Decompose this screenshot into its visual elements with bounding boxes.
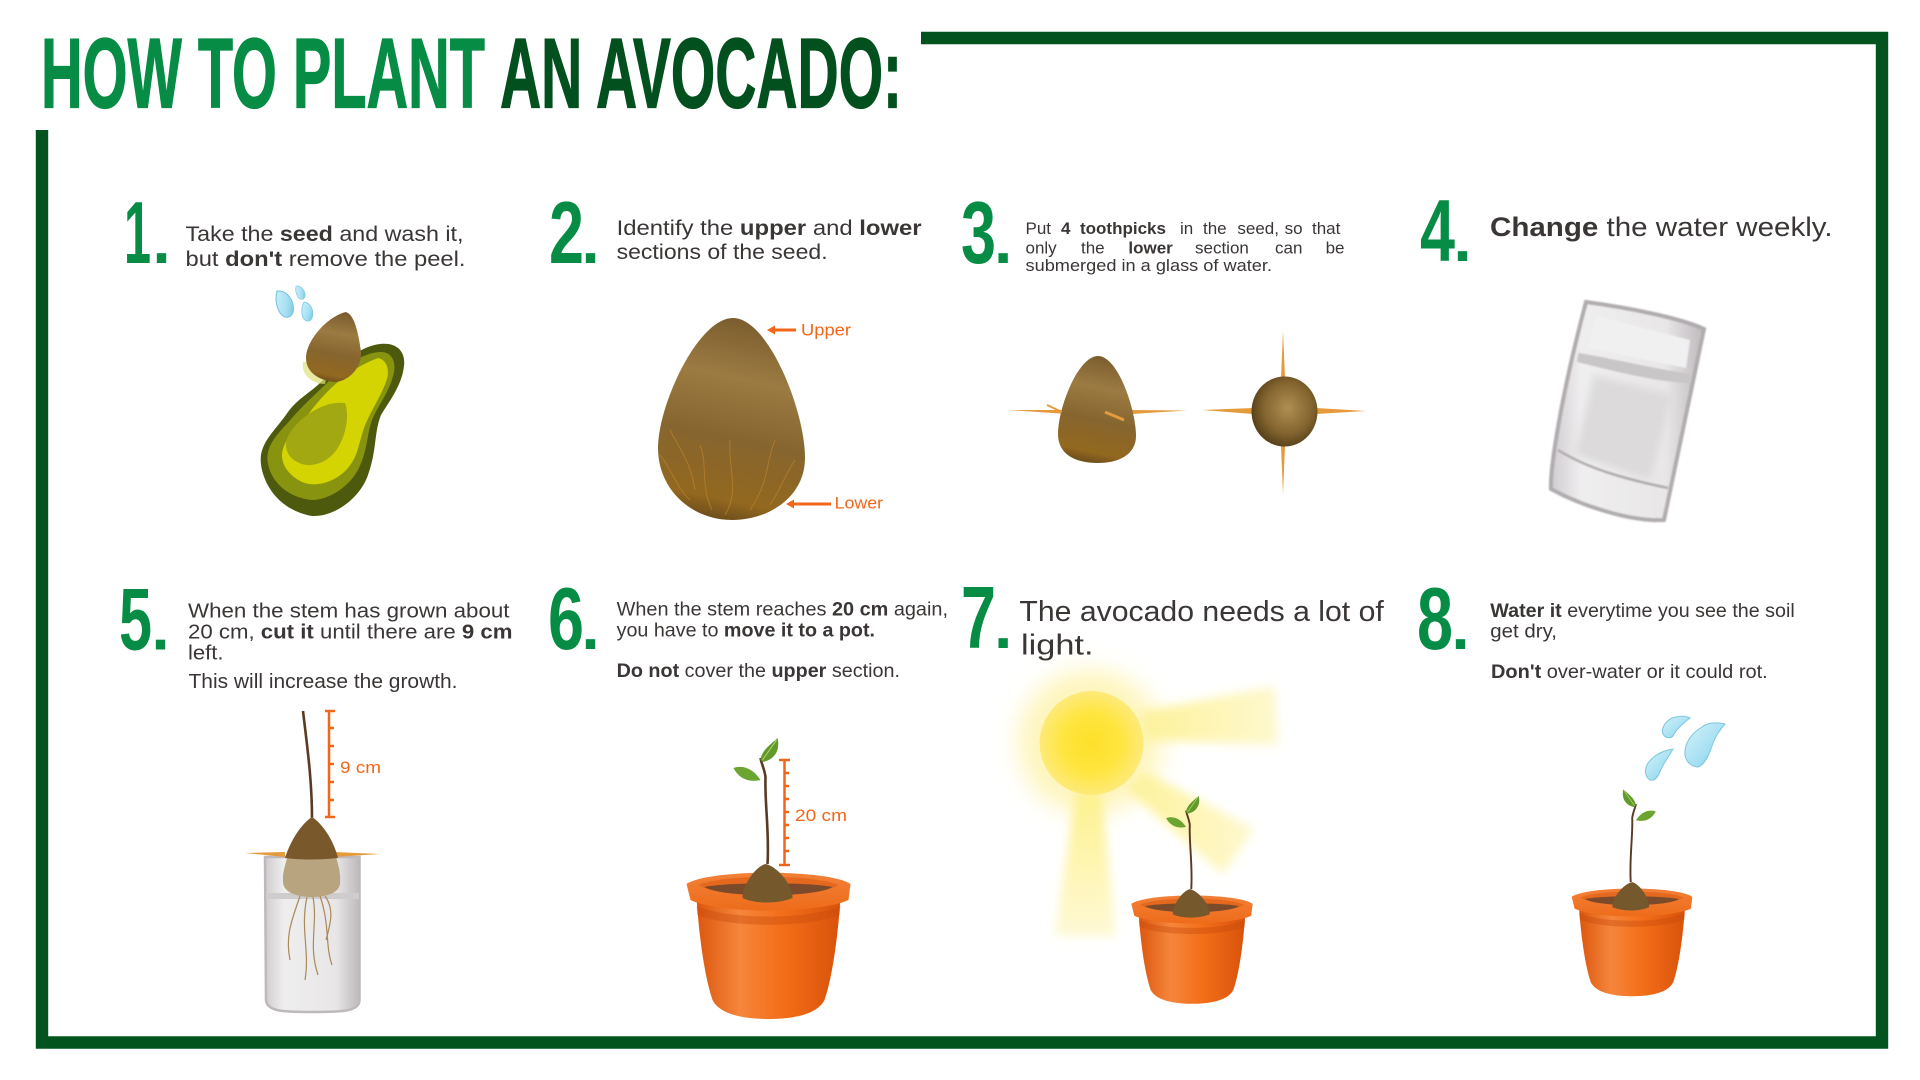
step 5 instruction xyxy=(188,600,512,693)
step number 2: . xyxy=(581,203,600,277)
step number 4: . xyxy=(1453,201,1472,275)
step 3 instruction: that xyxy=(1312,219,1341,238)
step 6 instruction: you have to move it to a pot. xyxy=(617,619,875,641)
step number 5: 5 xyxy=(119,570,152,668)
step 5 instruction: This will increase the growth. xyxy=(188,670,458,693)
lower label: Lower xyxy=(835,494,883,513)
step 3 instruction: be xyxy=(1326,238,1345,258)
ruler label: 9 cm xyxy=(340,758,381,777)
icon: side view of seed with toothpicks xyxy=(1008,356,1187,463)
step number 7: . xyxy=(994,588,1012,662)
step 5 instruction: left. xyxy=(188,642,224,664)
step 3 instruction: toothpicks xyxy=(1080,219,1166,238)
step 3 instruction: seed, xyxy=(1237,219,1279,238)
icon: seed in glass with roots and 9 cm ruler xyxy=(245,710,381,1012)
step 1 instruction xyxy=(186,222,466,271)
step number 1: 1 xyxy=(124,183,151,282)
step 8 instruction: Don't over-water or it could rot. xyxy=(1491,661,1768,683)
panel: step 4 xyxy=(1420,181,1833,520)
step 6 instruction xyxy=(617,598,948,682)
step number 8: . xyxy=(1451,589,1470,663)
step number 2: 2 xyxy=(549,183,584,282)
step number 1: . xyxy=(152,203,171,277)
step 7 instruction xyxy=(1019,596,1385,662)
step 3 instruction: Put xyxy=(1026,219,1051,238)
step 8 instruction: Water it everytime you see the soil xyxy=(1490,600,1795,622)
step 7 instruction: The avocado needs a lot of xyxy=(1019,596,1385,628)
panel: step 3 xyxy=(961,183,1366,494)
panel: step 7 xyxy=(961,568,1385,1004)
icon: top view of seed with toothpicks xyxy=(1202,331,1366,494)
step 3 instruction: the xyxy=(1081,238,1105,258)
step 6 instruction: When the stem reaches 20 cm again, xyxy=(617,598,948,620)
step 2 instruction: Identify the upper and lower xyxy=(617,216,922,240)
step 1 instruction: Take the seed and wash it, xyxy=(186,222,464,246)
panel: step 8 xyxy=(1417,569,1795,996)
step number 6: . xyxy=(581,589,600,663)
step number 3: . xyxy=(994,203,1012,277)
icon: potted seedling in sunlight xyxy=(1131,796,1253,1004)
step 3 instruction: section xyxy=(1195,238,1249,258)
step 3 instruction: in xyxy=(1180,219,1193,238)
panel: step 2 xyxy=(549,183,922,520)
step number 4: 4 xyxy=(1420,181,1455,280)
step 6 instruction: Do not cover the upper section. xyxy=(617,660,900,682)
icon: avocado seed with labelled sections xyxy=(658,318,883,520)
icon: potted seedling with 20 cm ruler xyxy=(686,738,850,1019)
step 8 instruction: get dry, xyxy=(1490,620,1557,642)
step number 8: 8 xyxy=(1417,569,1453,668)
step number 7: 7 xyxy=(961,568,996,667)
icon: water drops xyxy=(1646,716,1725,780)
upper label: Upper xyxy=(801,321,851,340)
title: AN AVOCADO: xyxy=(500,18,902,128)
step 7 instruction: light. xyxy=(1021,630,1094,662)
panel: step 6 xyxy=(548,569,948,1019)
icon: sun with rays xyxy=(1018,670,1278,936)
step 3 instruction: the xyxy=(1203,219,1227,238)
step 3 instruction xyxy=(1026,219,1345,275)
step 3 instruction: 4 xyxy=(1061,219,1071,238)
step 1 instruction: but don't remove the peel. xyxy=(186,247,466,271)
step 2 instruction: sections of the seed. xyxy=(617,240,828,264)
icon: potted seedling xyxy=(1572,789,1692,996)
step 3 instruction: only xyxy=(1026,238,1057,258)
panel: step 1 xyxy=(124,183,466,516)
icon: glass of water xyxy=(1551,302,1704,520)
step 5 instruction: 20 cm, cut it until there are 9 cm xyxy=(188,620,512,644)
upper arrow xyxy=(767,326,796,334)
step 5 instruction: When the stem has grown about xyxy=(188,600,510,622)
lower arrow xyxy=(786,500,831,508)
ruler label: 20 cm xyxy=(795,806,847,825)
step 3 instruction: so xyxy=(1285,219,1303,238)
icon: halved avocado with seed and water drops xyxy=(261,284,404,516)
panel: step 5 xyxy=(119,570,512,1012)
step number 6: 6 xyxy=(548,569,584,668)
step number 3: 3 xyxy=(961,183,996,282)
title: HOW TO PLANT xyxy=(41,18,485,128)
step number 5: . xyxy=(151,590,170,664)
step 3 instruction: can xyxy=(1275,238,1302,258)
step 3 instruction: lower xyxy=(1128,238,1173,258)
step 2 instruction xyxy=(617,216,922,264)
step 3 instruction: submerged in a glass of water. xyxy=(1026,256,1272,275)
step 8 instruction xyxy=(1490,600,1795,683)
step 4 instruction: Change the water weekly. xyxy=(1490,212,1833,242)
